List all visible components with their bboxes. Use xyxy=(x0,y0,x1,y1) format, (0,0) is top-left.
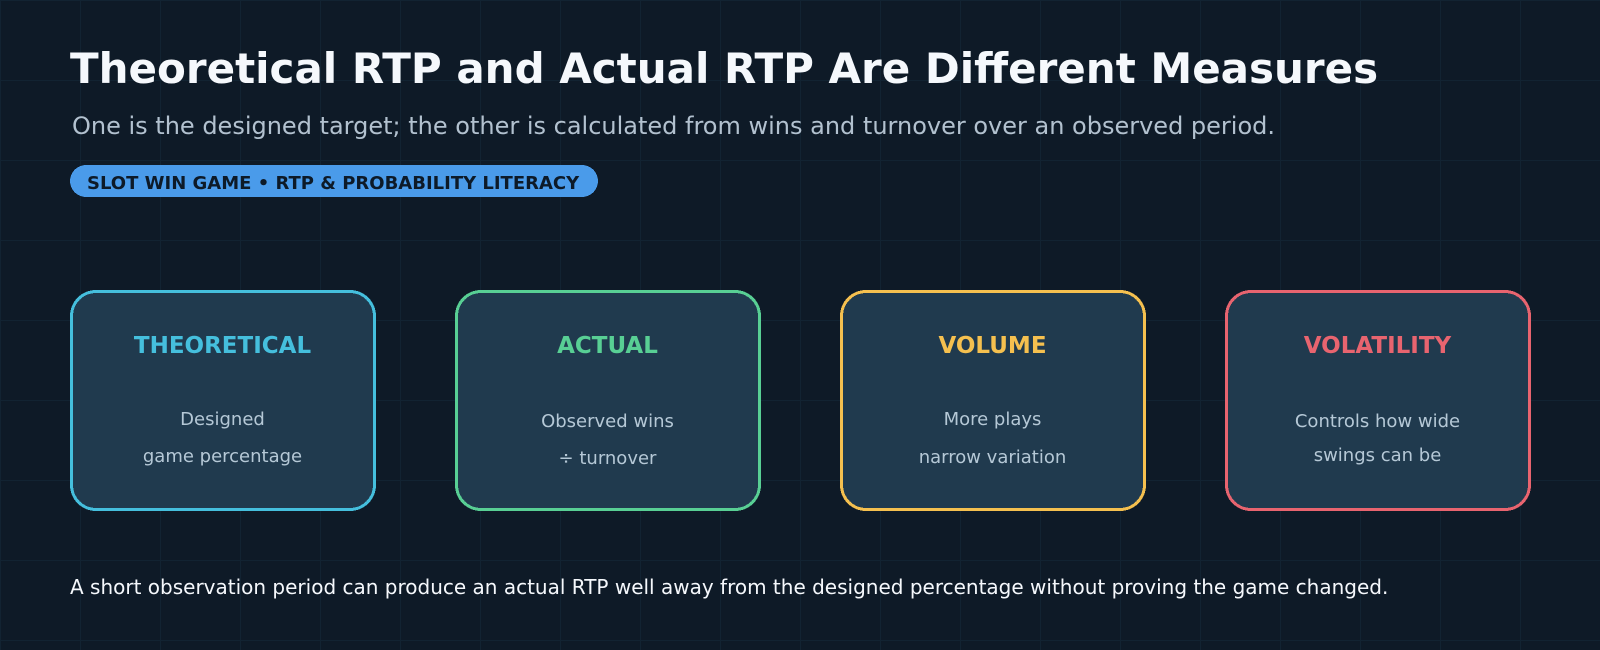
footer note: A short observation period can produce an actual RTP well away from the designed percentage without proving the game changed. xyxy=(70,575,1388,599)
panel: actual: ACTUAL xyxy=(557,333,658,359)
panel: volume: VOLUME xyxy=(938,333,1047,359)
panel: theoretical: Designed xyxy=(180,409,265,430)
panel: actual xyxy=(455,290,761,511)
panel: actual: Observed wins xyxy=(541,411,674,432)
panel: volume xyxy=(840,290,1146,511)
panel: volatility: Controls how wide xyxy=(1295,411,1460,432)
panel: volatility xyxy=(1225,290,1531,511)
title: Theoretical RTP and Actual RTP Are Different Measures xyxy=(70,44,1378,93)
panel: theoretical xyxy=(70,290,376,511)
panel: volatility: VOLATILITY xyxy=(1304,333,1452,359)
panel: volume: narrow variation xyxy=(919,447,1066,468)
panel: volatility: swings can be xyxy=(1314,445,1441,466)
panel: theoretical: game percentage xyxy=(143,446,302,467)
tag pill xyxy=(70,165,598,197)
panel: actual: ÷ turnover xyxy=(559,448,657,469)
panel: theoretical: THEORETICAL xyxy=(134,333,311,359)
subtitle: One is the designed target; the other is calculated from wins and turnover over an observed period. xyxy=(72,112,1275,140)
tag pill: SLOT WIN GAME • RTP & PROBABILITY LITERACY xyxy=(87,173,580,194)
panel: volume: More plays xyxy=(944,409,1041,430)
